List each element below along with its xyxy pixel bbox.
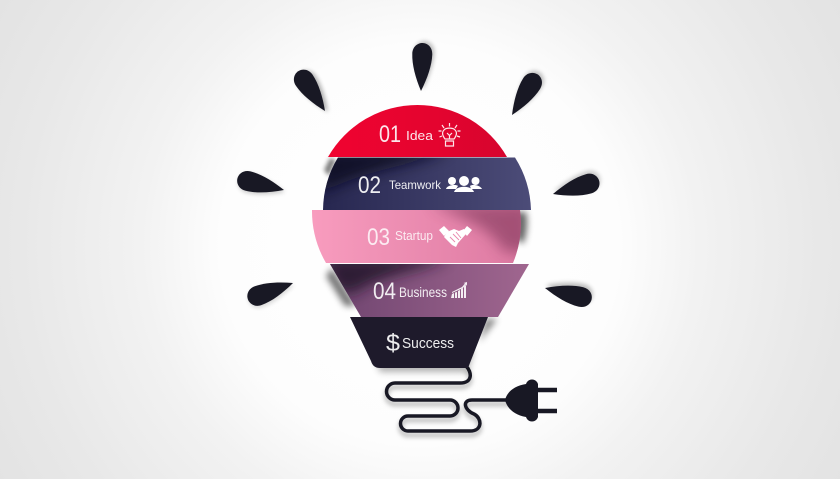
slice 04 label: 04 (373, 278, 396, 305)
ray: upper left (290, 65, 336, 119)
slice 02: teamwork (322, 157, 531, 210)
ray: upper right (504, 67, 548, 121)
icon: growth chart (451, 282, 467, 298)
plug (505, 380, 557, 422)
ray: top (411, 41, 435, 91)
slice 01 label (379, 121, 460, 148)
slice 02 label: 02 (358, 172, 381, 199)
slice 03 label (367, 224, 472, 251)
slice 04 label: Business (399, 285, 447, 300)
ray: middle left (235, 169, 288, 202)
ray: lower left (244, 274, 297, 311)
icon: team (446, 176, 482, 192)
slice 03 label: 03 (367, 224, 390, 251)
ray: lower right (543, 275, 595, 309)
icon: handshake (439, 226, 472, 247)
slice 03: startup (312, 210, 532, 263)
slice 01: idea (328, 105, 507, 157)
slice 02 label (358, 172, 482, 199)
slice 05 label (386, 330, 454, 357)
slice 05 label: $ (386, 330, 400, 357)
slice 01 label: Idea (406, 129, 433, 143)
slice 04: business (322, 264, 529, 317)
infographic: light bulb (118, 0, 723, 479)
slice 01 label: 01 (379, 121, 401, 148)
slice 02 label: Teamwork (389, 178, 442, 192)
icon: idea bulb (438, 123, 460, 146)
slice 03 label: Startup (395, 229, 433, 243)
slice 04 label (373, 278, 467, 305)
slice 05 label: Success (402, 336, 454, 352)
slice 05: success (350, 317, 497, 372)
power cord and plug (386, 366, 557, 435)
ray: middle right (550, 168, 604, 204)
